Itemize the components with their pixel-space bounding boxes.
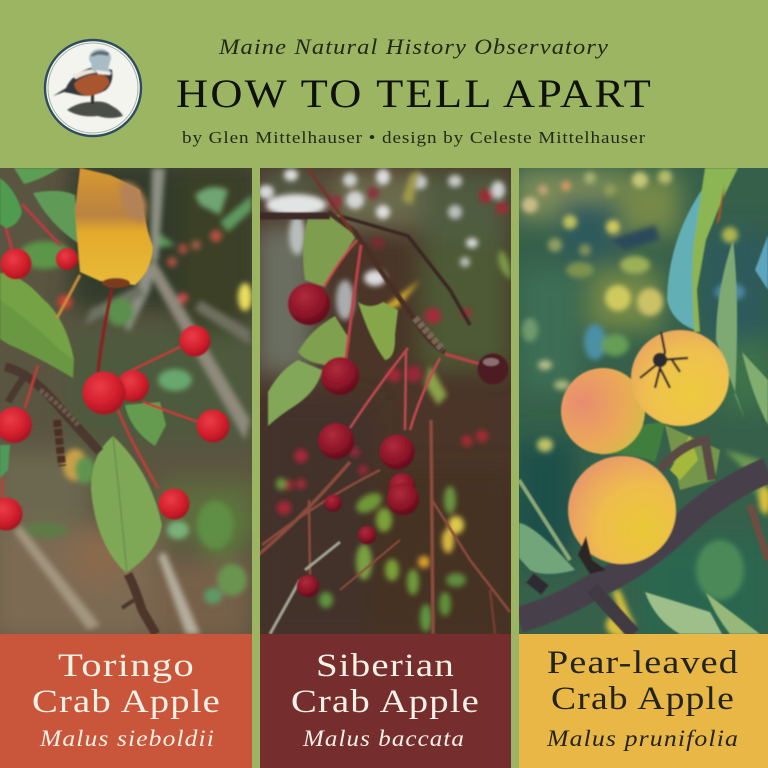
logo: harlequin duck badge (45, 40, 141, 136)
stems (324, 240, 357, 287)
leaves (667, 188, 703, 330)
branches (519, 470, 768, 620)
leaf upper (33, 191, 78, 243)
caption: Siberian: Siberian (316, 648, 455, 684)
yellow leaf (75, 168, 153, 285)
caption: Pear-leaved: Malus prunifolia (546, 726, 739, 751)
caption: Siberian (260, 634, 511, 768)
caption: Siberian: Malus baccata (302, 726, 465, 751)
branches (258, 212, 330, 220)
panel: Pear-leaved crab apple photo (515, 168, 768, 640)
leaf top left (0, 178, 22, 228)
berries (0, 248, 32, 280)
calyx on top apple (640, 332, 688, 388)
caption: Toringo: Toringo (58, 648, 195, 684)
berries (288, 283, 330, 325)
caption: Toringo: Malus sieboldii (39, 726, 215, 751)
organisation name: Maine Natural History Observatory (218, 34, 609, 59)
leaf lower hanging (91, 436, 162, 573)
header title block (176, 34, 653, 147)
caption: Toringo: Crab Apple (32, 684, 221, 720)
panel: Siberian crab apple photo (255, 168, 520, 640)
apples (561, 368, 645, 454)
caption: Siberian: Crab Apple (291, 684, 480, 720)
panel: Toringo crab apple photo (0, 160, 260, 640)
caption: Toringo (0, 634, 252, 768)
leaves (303, 215, 355, 287)
main heading: HOW TO TELL APART (176, 71, 653, 116)
caption: Pear-leaved: Crab Apple (551, 681, 735, 717)
caption: Pear-leaved: Pear-leaved (547, 645, 739, 681)
branches and stems (5, 367, 100, 452)
caption: Pear-leaved (519, 634, 768, 768)
byline: by Glen Mittelhauser • design by Celeste Mittelhauser (182, 128, 646, 147)
